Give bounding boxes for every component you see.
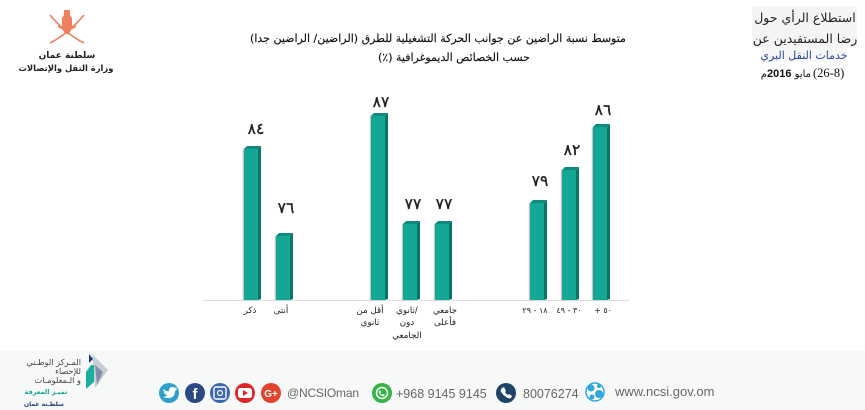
bar: male 84 [243, 120, 264, 316]
bar: university 77: ٧٧ [436, 195, 452, 213]
bar chart [203, 93, 630, 341]
bar: age 50+ 86: + ٥٠ [594, 306, 612, 315]
whatsapp number: +968 9145 9145 [396, 387, 487, 401]
bar: age 18-29 79 [522, 172, 548, 315]
survey title block [752, 6, 857, 80]
bar: below secondary 87: ٨٧ [373, 93, 389, 111]
bar: secondary 77: دون [400, 318, 414, 328]
ministry logo: وزارة النقل والإتصالات [19, 63, 113, 74]
NCSI logo: للإحصاء [55, 366, 81, 377]
bar: female 76: ٧٦ [278, 199, 294, 217]
icon: google plus [261, 383, 281, 403]
ministry logo [19, 10, 113, 74]
NCSI logo: و الـمعلومـات [35, 375, 81, 385]
bar: age 18-29 79: ٧٩ [532, 172, 548, 190]
icon: twitter [159, 383, 179, 403]
bar: below secondary 87 [356, 93, 389, 328]
chart title: حسب الخصائص الديموغرافية (٪) [378, 51, 530, 64]
bar: secondary 77 [392, 195, 422, 341]
bar: age 18-29 79: ١٨ - ٢٩ [522, 306, 548, 315]
icon: youtube [235, 383, 255, 403]
NCSI logo: تميـز المعرفة [25, 388, 67, 396]
bar: male 84: ذكر [243, 306, 257, 316]
logo mark [86, 354, 108, 389]
bar: secondary 77: الجامعي [392, 331, 422, 341]
bar: university 77: جامعي [433, 306, 457, 316]
icon: national emblem [50, 10, 84, 43]
bar: below secondary 87: أقل من [356, 304, 384, 316]
social icons row [159, 383, 714, 403]
website: www.ncsi.gov.om [614, 384, 714, 399]
footer band [0, 351, 865, 410]
bar: secondary 77: ٧٧ [405, 195, 421, 213]
bar: female 76 [274, 199, 294, 316]
bar: age 50+ 86: ٨٦ [595, 101, 611, 119]
icon: facebook [185, 383, 205, 403]
icon: facebook: f [192, 386, 198, 403]
icon: google plus: G+ [264, 389, 278, 400]
phone number: 80076274 [523, 387, 579, 401]
bar: age 30-49 82 [556, 141, 582, 315]
survey title block: استطلاع الرأي حول [754, 9, 856, 26]
icon: phone [496, 383, 516, 403]
NCSI logo [24, 354, 108, 408]
chart title: متوسط نسبة الراضين عن جوانب الحركة التشغيلية للطرق (الراضين/ الراضين جدا) [250, 32, 626, 45]
icon: instagram [210, 383, 230, 403]
NCSI logo: سلطـنة عمان [24, 401, 64, 408]
survey title block: مايو 2016م [761, 68, 811, 80]
ministry name: سلطنة عمان [39, 51, 96, 61]
survey title block: رضا المستفيدين عن [753, 31, 857, 47]
bar: age 30-49 82: ٨٢ [564, 141, 580, 159]
bar: below secondary 87: ثانوي [361, 318, 380, 328]
chart title [250, 32, 626, 64]
bar: university 77 [433, 195, 457, 328]
bar: university 77: فأعلى [434, 316, 456, 328]
bar: age 30-49 82: ٣٠ - ٤٩ [556, 306, 582, 315]
survey title block: خدمات النقل البري [760, 49, 848, 62]
NCSI logo: المـركز الوطـني [26, 357, 81, 367]
bar: male 84: ٨٤ [248, 120, 264, 138]
survey title block: (26-8) [813, 66, 844, 80]
icon: globe [586, 383, 604, 401]
bar: female 76: أنثى [274, 304, 288, 316]
twitter handle: @NCSIOman [287, 386, 359, 400]
bar: secondary 77: ثانوي/ [396, 306, 418, 316]
bar: age 50+ 86 [593, 101, 612, 315]
icon: whatsapp [372, 383, 392, 403]
